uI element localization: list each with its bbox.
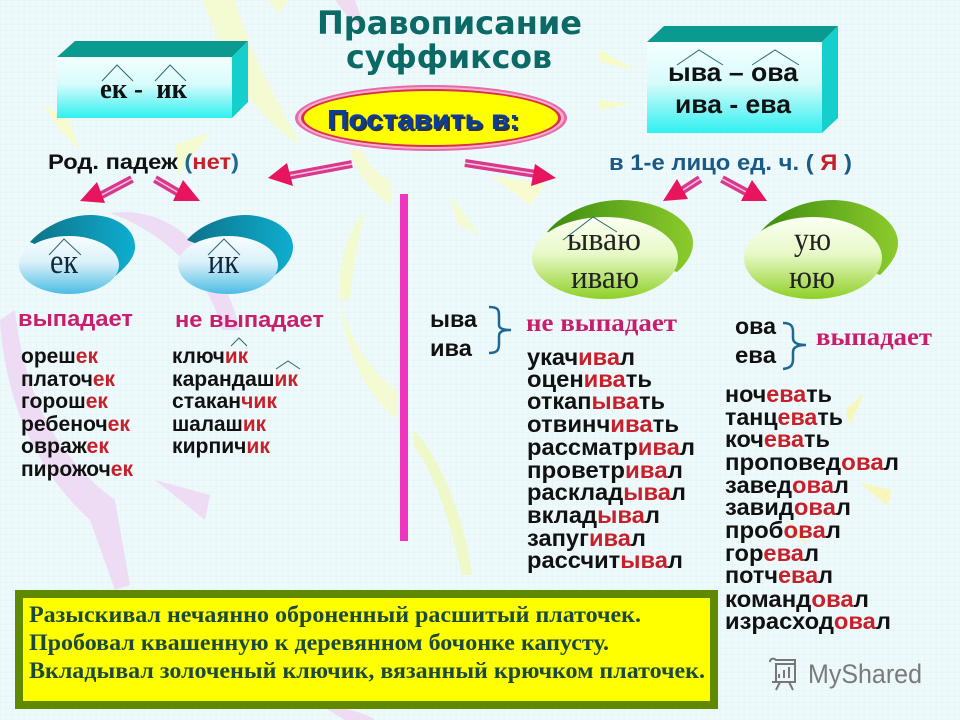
word list: ек: горошек [21,390,108,413]
arrow: to ек [80,179,132,203]
heading: выпадает (right): выпадает [816,324,932,351]
word list: ева ова: пробовал [725,517,841,543]
word list: ива ыва: рассматривал [527,434,695,460]
word list: ива ыва: укачивал [527,344,635,370]
labels: ова ева [735,313,776,368]
arrow: to ую [722,179,767,201]
labels: ыва ива: ива [430,335,472,361]
word list: ива ыва: откапывать [527,388,665,414]
word list: ик: кирпичик [172,435,270,458]
oval: Поставить в: Поставить в: [329,106,521,137]
word list: ева ова [725,381,899,634]
word list: ева ова: кочевать [725,426,830,452]
heading: не выпадает (left): не выпадает [175,307,324,332]
word list: ива ыва: раскладывал [527,479,686,505]
word list: ек: пирожочек [21,458,133,481]
oval: ик: ик [208,242,240,281]
labels: ыва ива [430,306,477,361]
word list: ива ыва [527,344,695,573]
word list: ек: платочек [21,368,115,391]
word list: ева ова: проповедовал [725,449,899,475]
word list: ик [172,345,298,458]
box: ыва ова ива ева [647,26,838,133]
title [317,4,582,76]
word list: ива ыва: вкладывал [527,502,660,528]
box: ыва ова ива ева: ива - ева [675,89,792,119]
word list: ива ыва: проветривал [527,457,683,483]
watermark: MyShared logo [770,659,922,690]
word list: ек: ребеночек [21,413,130,436]
word list: ева ова: израсходовал [725,608,891,634]
word list: ева ова: потчевал [725,562,833,588]
word list: ива ыва: рассчитывал [527,547,683,573]
watermark: MyShared logo: MyShared [808,659,922,689]
labels: ыва ива: ыва [430,306,477,332]
word list: ива ыва: оценивать [527,366,652,392]
vertical divider bar [400,194,408,541]
oval: ек [19,215,135,294]
word list: ик: карандашик [172,368,298,391]
box: ек - ик [57,41,248,118]
word list: ек [21,345,133,481]
word list: ева ова: горевал [725,540,819,566]
oval: Поставить в [295,85,567,151]
brace: ыва ива [489,307,511,353]
word list: ива ыва: запугивал [527,525,646,551]
labels: ова ева: ова [735,313,776,339]
word list: ева ова: танцевать [725,404,843,430]
word list: ева ова: ночевать [725,381,832,407]
panel: example sentences: Пробовал квашенную к деревянном бочонке капусту. [29,630,609,655]
left label: Род. падеж (нет): Род. падеж (нет) [48,151,239,174]
right label: в 1-е лицо ед. ч. (Я): в 1-е лицо ед. ч. ( Я ) [609,150,852,175]
title: суффиксов [346,38,552,76]
box: ыва ова ива ева: ыва – ова [668,57,799,87]
panel: example sentences: Разыскивал нечаянно оброненный расшитый платочек. [29,602,641,627]
labels: ова ева: ева [735,342,776,368]
word list: ик: шалашик [172,413,266,436]
heading: не выпадает (middle): не выпадает [526,310,677,337]
oval: ую юю: ую [794,222,831,258]
heading: выпадает (left): выпадает [18,306,133,331]
suffix hats over ключик and карандашик [231,338,300,369]
title: Правописание [317,4,582,42]
arrow: oval to left [268,163,352,186]
word list: ек: овражек [21,435,109,458]
word list: ева ова: заведовал [725,472,849,498]
oval: ек: ек [50,242,79,281]
word list: ива ыва: отвинчивать [527,411,679,437]
box: ек - ик: ек - ик [100,74,188,105]
arrow: oval to right [465,163,556,186]
word list: ева ова: командовал [725,586,869,612]
panel: example sentences [15,590,718,709]
oval: ываю иваю: ываю [567,222,641,258]
word list: ик: стаканчик [172,390,277,413]
arrow: to ываю [663,179,700,201]
oval: ываю иваю: иваю [571,260,639,296]
oval: Поставить в: Поставить в: [327,104,519,135]
oval: ываю иваю [532,200,693,299]
oval: ую юю: юю [789,260,835,296]
arrow: to ик [155,179,200,201]
word list: ева ова: завидовал [725,494,851,520]
oval: ую юю [744,200,898,299]
word list: ек: орешек [21,345,98,368]
panel: example sentences: Вкладывал золоченый ключик, вязанный крючком платочек. [29,658,705,683]
oval: ик [178,215,293,294]
brace: ова ева [783,323,806,369]
word list: ик: ключик [172,345,248,368]
